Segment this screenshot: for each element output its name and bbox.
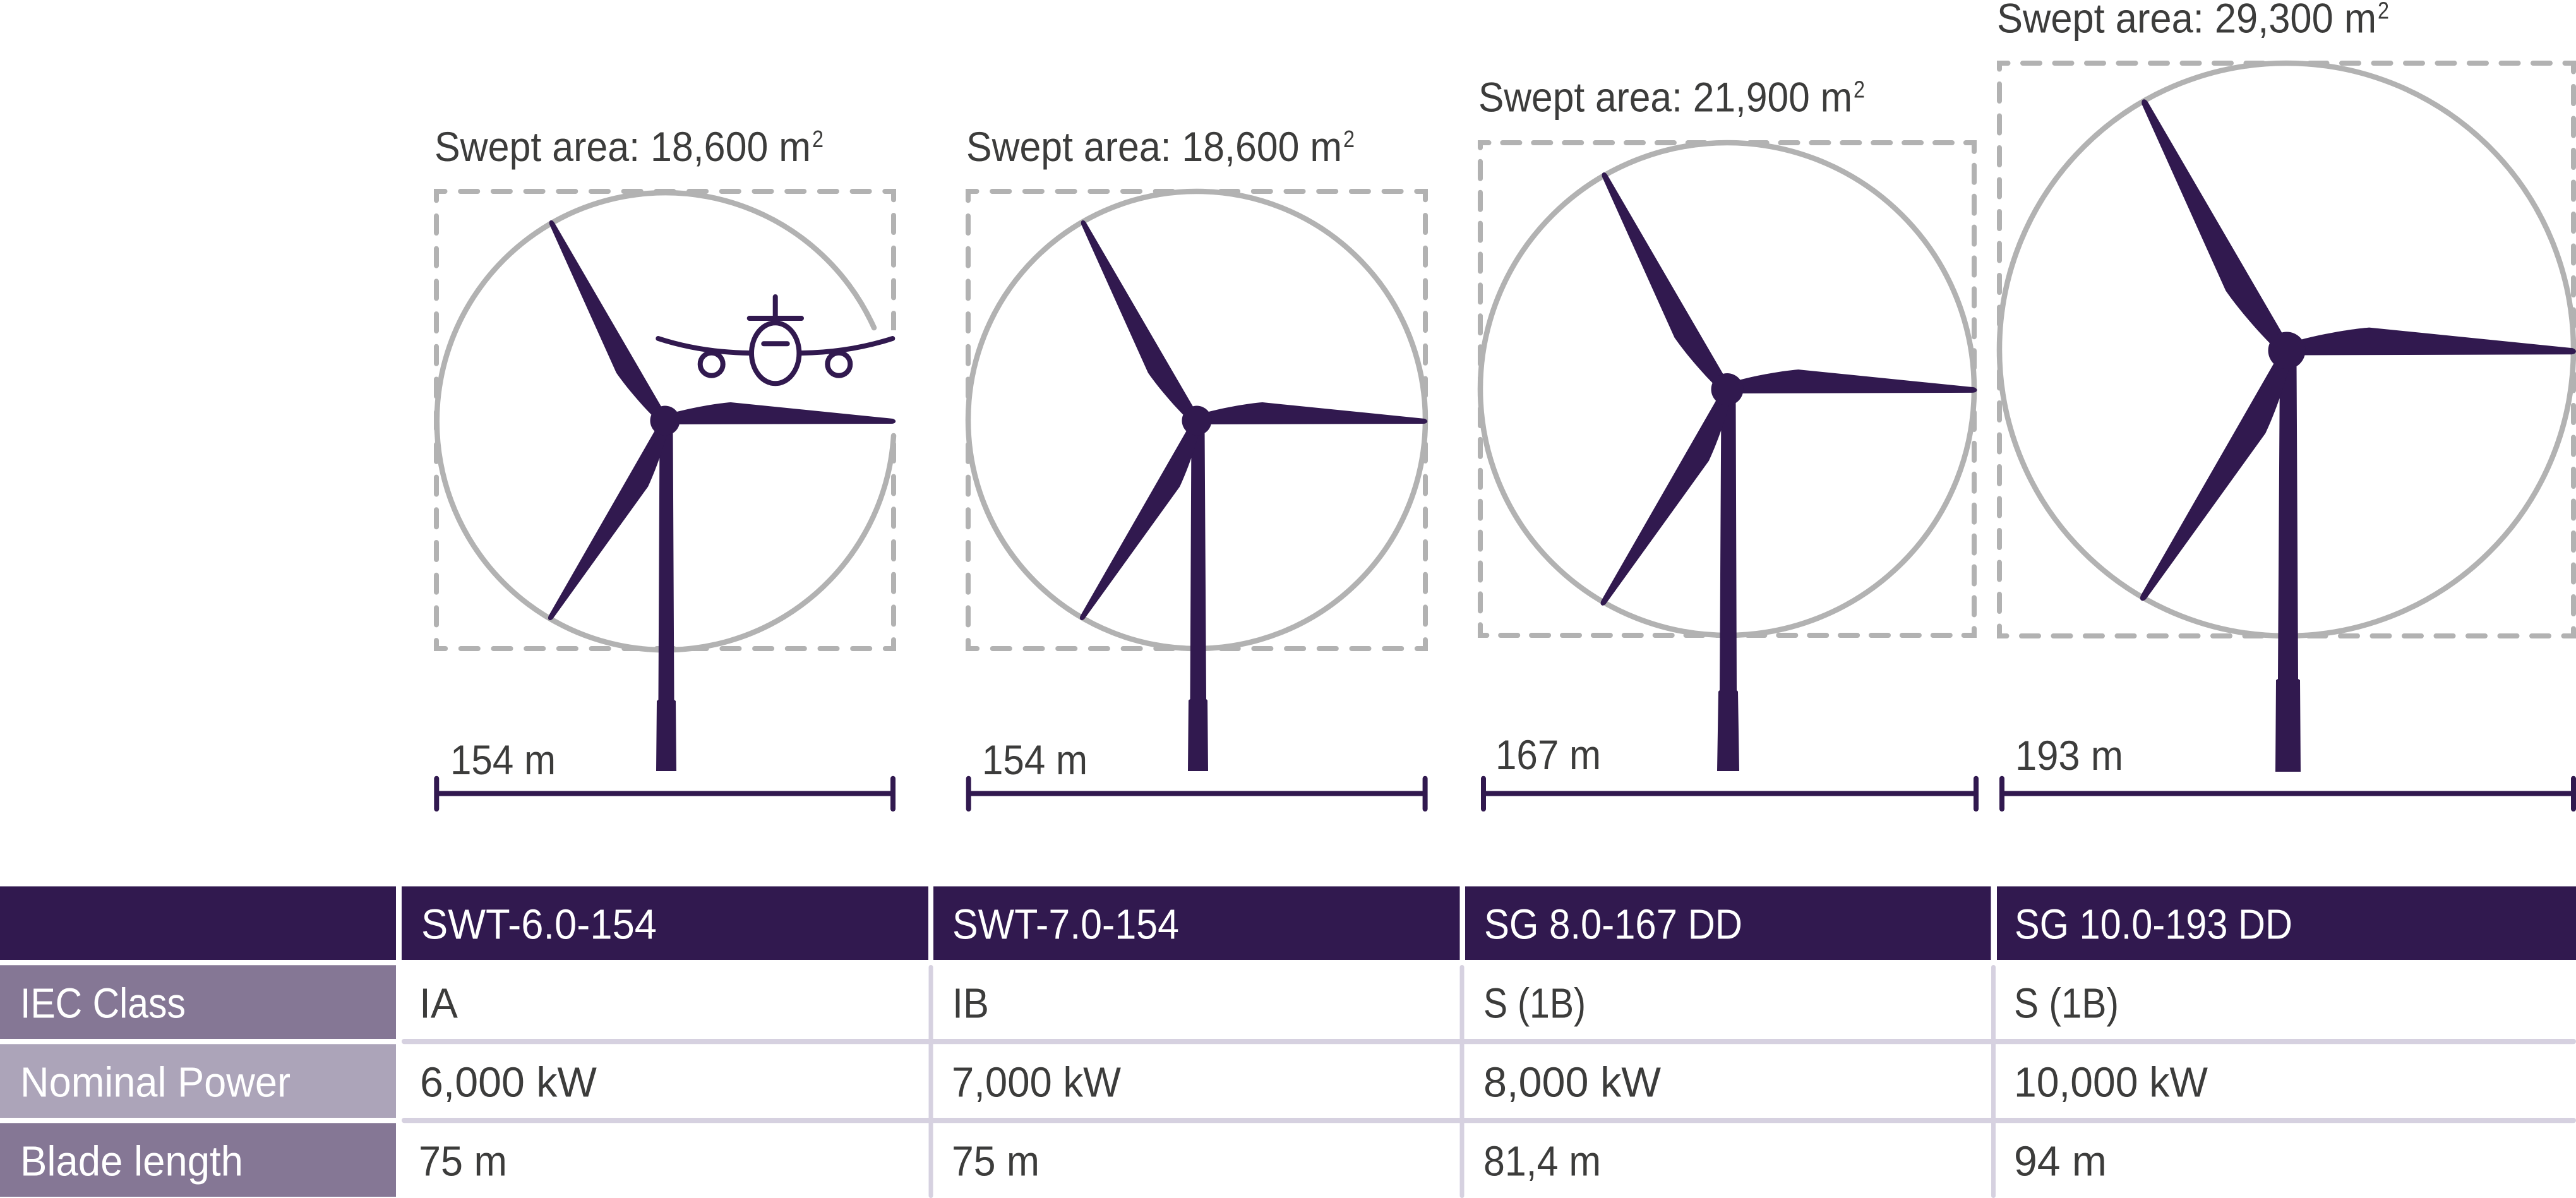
label: swept area 18,600: Swept area: 18,600 m (966, 123, 1342, 170)
label: swept area 18,600: 2 (1343, 126, 1355, 153)
diameter dimension line (1483, 779, 1976, 809)
diameter dimension line (969, 779, 1425, 809)
values: SWT-6.0-154: 75 m (419, 1138, 507, 1185)
values: SG 10.0-193 DD (2014, 980, 2208, 1185)
diameter dimension line (2002, 779, 2573, 809)
rotor blades and hub (2123, 98, 2576, 613)
swept area dashed square (1480, 143, 1974, 635)
tower (1188, 429, 1208, 771)
values: SWT-7.0-154 (952, 980, 1122, 1185)
values: SG 10.0-193 DD: 10,000 kW (2014, 1059, 2208, 1106)
header: SWT-6.0-154: SWT-6.0-154 (421, 901, 657, 949)
header row (0, 887, 2576, 960)
label: swept area 21,900: Swept area: 21,900 m (1478, 73, 1852, 120)
rotor blades and hub (534, 219, 896, 630)
turbine diagram: SWT-7.0-154 (966, 123, 1427, 809)
swept area dashed square (436, 191, 894, 649)
turbine diagram: SG 10.0-193 DD (1997, 0, 2576, 809)
rotor circle (968, 191, 1425, 649)
values: SWT-7.0-154: IB (952, 980, 989, 1027)
values: SG 10.0-193 DD: 94 m (2014, 1138, 2107, 1185)
tower (656, 429, 676, 771)
values: SWT-6.0-154: IA (419, 980, 458, 1027)
diameter dimension line (436, 779, 893, 809)
rotor circle (1480, 143, 1974, 635)
label: swept area 18,600: 2 (812, 126, 824, 153)
label: 193 m: 193 m (2015, 732, 2123, 779)
swept area dashed square (1999, 63, 2573, 636)
values: SWT-6.0-154: 6,000 kW (420, 1059, 597, 1106)
values: SG 8.0-167 DD (1483, 980, 1662, 1185)
icon: airplane (658, 297, 892, 383)
swept area dashed square (968, 191, 1425, 649)
values: SG 8.0-167 DD: 8,000 kW (1483, 1059, 1662, 1106)
turbine diagram: SWT-6.0-154 (434, 123, 901, 809)
label: Nominal Power: Nominal Power (20, 1059, 291, 1106)
label: Blade length: Blade length (20, 1138, 243, 1185)
rotor blades and hub (1065, 219, 1427, 630)
label: 154 m: 154 m (450, 736, 556, 783)
header: SG 8.0-167 DD: SG 8.0-167 DD (1484, 901, 1742, 949)
row labels (0, 965, 396, 1197)
turbine diagram: SG 8.0-167 DD (1478, 73, 1977, 809)
values: SG 10.0-193 DD: S (1B) (2014, 980, 2119, 1027)
values: SG 8.0-167 DD: 81,4 m (1483, 1138, 1601, 1185)
values: SG 8.0-167 DD: S (1B) (1483, 980, 1586, 1027)
rotor circle (1999, 63, 2573, 636)
header: SG 10.0-193 DD: SG 10.0-193 DD (2015, 901, 2292, 949)
rotor blades and hub (1585, 171, 1977, 616)
label: 167 m: 167 m (1495, 731, 1601, 778)
label: swept area 18,600: Swept area: 18,600 m (434, 123, 811, 170)
rotor circle with gap (437, 193, 894, 650)
tower (2275, 363, 2301, 772)
label: swept area 21,900: 2 (1854, 77, 1865, 104)
white gap behind airplane (887, 330, 901, 441)
specification table (0, 887, 2576, 1198)
label: 154 m: 154 m (982, 736, 1087, 783)
tower (1717, 401, 1739, 771)
label: IEC Class: IEC Class (20, 980, 186, 1027)
table grid lines (402, 965, 2576, 1198)
header: SWT-7.0-154: SWT-7.0-154 (952, 901, 1179, 949)
values: SWT-6.0-154 (419, 980, 597, 1185)
values: SWT-7.0-154: 75 m (952, 1138, 1039, 1185)
values: SWT-7.0-154: 7,000 kW (952, 1059, 1122, 1106)
